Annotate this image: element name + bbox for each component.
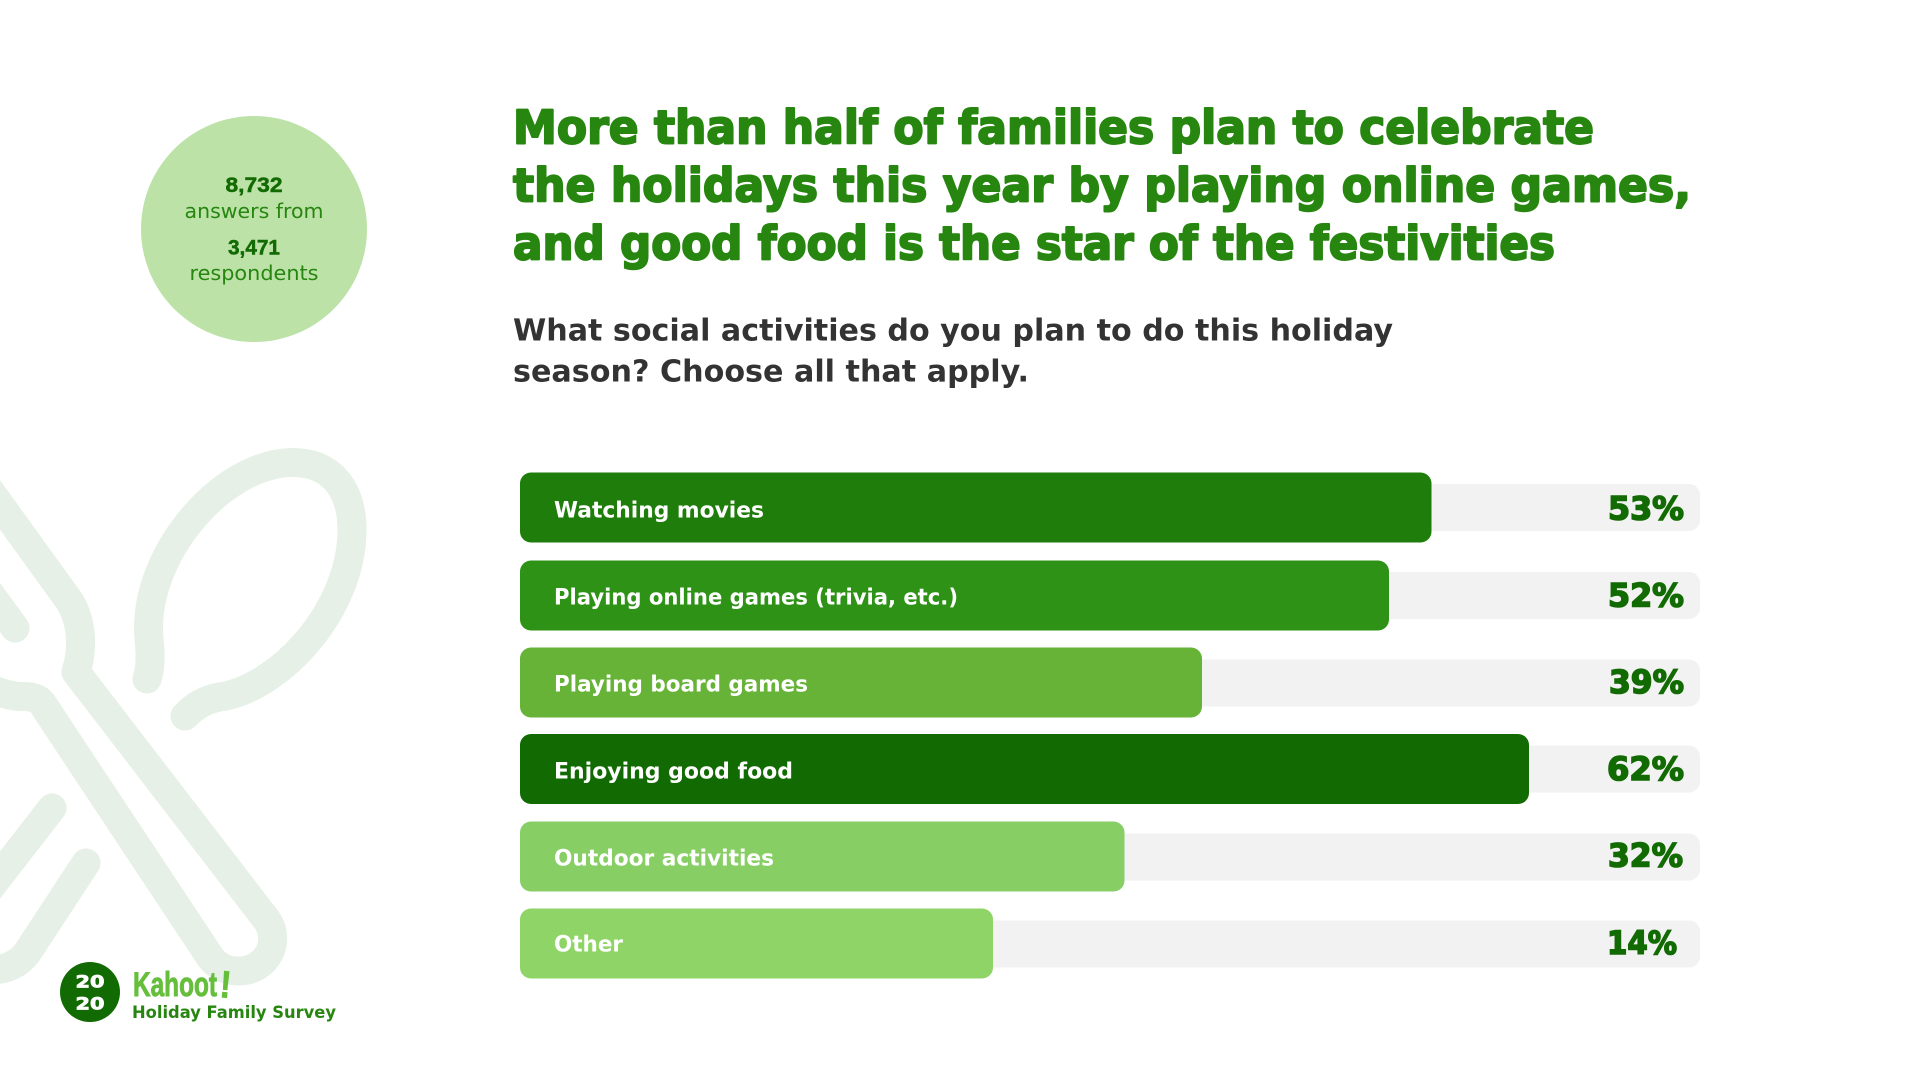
row: Watching movies 53%: Watching movies	[554, 498, 764, 524]
row: Playing board games 39%: 39%	[1609, 663, 1684, 701]
row: Watching movies 53%: 53%	[1608, 490, 1684, 528]
subtitle: survey question: What social activities do you plan to do this holiday	[513, 314, 1393, 348]
row: Enjoying good food 62%: Enjoying good food	[554, 760, 793, 784]
logo: Kahoot! wordmark: !	[218, 964, 233, 1007]
row: Outdoor activities 32%: 32%	[1608, 836, 1683, 874]
logo caption: Holiday Family Survey	[132, 1003, 336, 1022]
subtitle: survey question: season? Choose all that apply.	[513, 354, 1029, 390]
row: Outdoor activities 32%: Outdoor activities	[554, 846, 774, 872]
stats circle	[141, 116, 367, 342]
title: the holidays this year by playing online games,	[513, 158, 1691, 212]
row: Playing board games 39%: Playing board games	[554, 672, 808, 698]
stat: respondents count: 3,471	[228, 236, 280, 260]
row: Other 14%: Other	[554, 932, 623, 958]
row: Watching movies 53%	[520, 472, 1700, 542]
logo: 2020 badge: 20	[76, 972, 105, 992]
logo: Kahoot! wordmark: Kahoot	[133, 966, 217, 1004]
icon: watermark fork and spoon	[0, 462, 352, 971]
title: More than half of families plan to celebrate	[513, 100, 1594, 154]
row: Other 14%	[520, 908, 1700, 978]
row: Enjoying good food 62%	[520, 734, 1700, 804]
row: Enjoying good food 62%: 62%	[1607, 750, 1684, 788]
logo: 2020 badge: 20	[76, 994, 105, 1014]
row: Playing online games 52%	[520, 560, 1700, 630]
stat: answers label: answers from	[184, 199, 324, 223]
row: Playing board games 39%	[520, 648, 1700, 718]
row: Other 14%: 14%	[1607, 924, 1677, 962]
logo: 2020 badge	[60, 962, 120, 1022]
title	[513, 100, 1691, 270]
row: Outdoor activities 32%	[520, 822, 1700, 892]
row: Playing online games 52%: Playing online games (trivia, etc.)	[554, 586, 958, 610]
bar chart	[520, 472, 1700, 978]
stat: respondents label: respondents	[190, 261, 318, 285]
row: Playing online games 52%: 52%	[1608, 576, 1684, 614]
subtitle: survey question	[513, 314, 1393, 390]
stat: answers count: 8,732	[226, 174, 282, 197]
title: and good food is the star of the festivities	[513, 216, 1555, 270]
